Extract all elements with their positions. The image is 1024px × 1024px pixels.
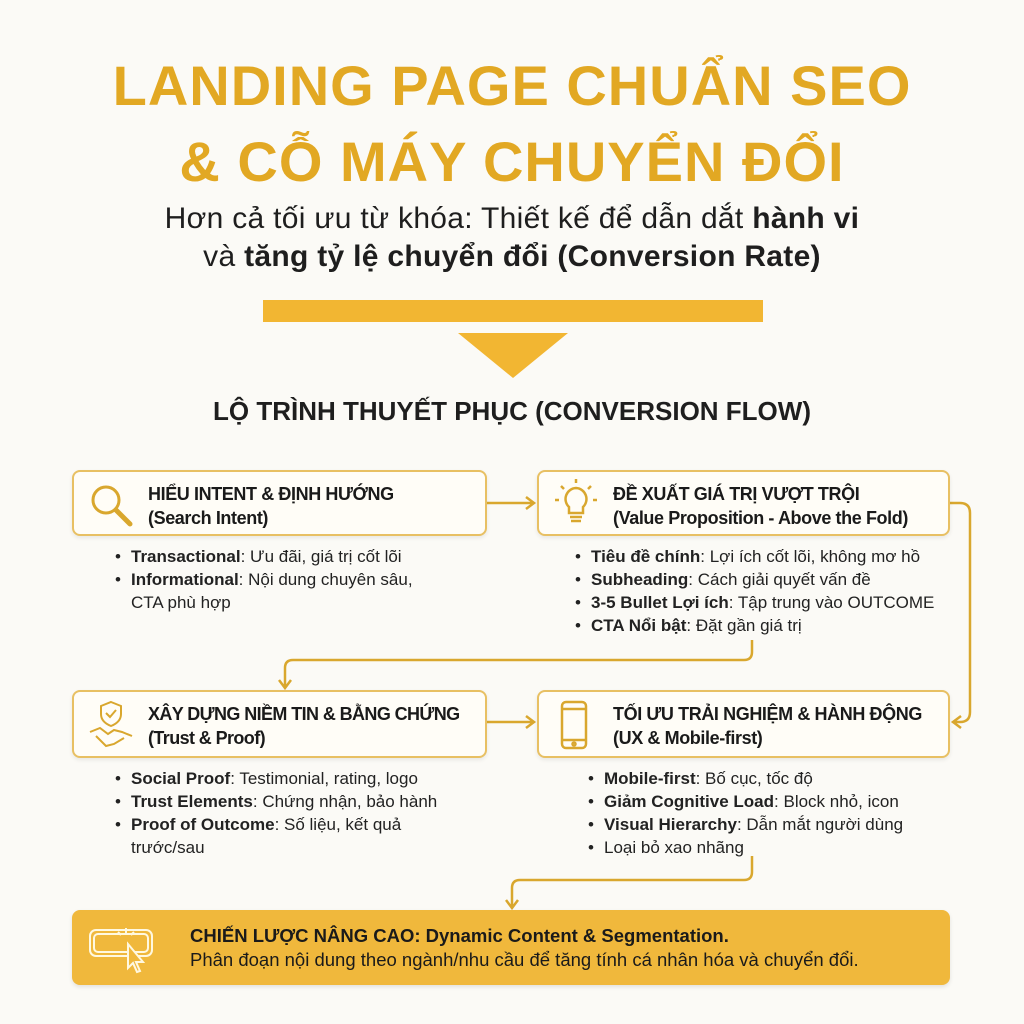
list: ux: Giảm Cognitive Load: Block nhỏ, icon: [604, 792, 899, 811]
panel: ux: TỐI ƯU TRẢI NGHIỆM & HÀNH ĐỘNG: [613, 704, 922, 724]
panel: ux: [537, 690, 950, 758]
list: trust: Social Proof: Testimonial, rating, logo: [131, 769, 418, 788]
icon: click button: [89, 928, 153, 974]
panel: advanced strategy: Phân đoạn nội dung theo ngành/nhu cầu để tăng tính cá nhân hóa và chuyển đổi.: [190, 949, 859, 970]
panel: value: (Value Proposition - Above the Fold): [613, 508, 908, 528]
list: trust: Trust Elements: Chứng nhận, bảo hành: [131, 792, 437, 811]
list: ux: Visual Hierarchy: Dẫn mắt người dùng: [604, 815, 903, 834]
icon: magnifier: [92, 486, 132, 526]
list: value: Subheading: Cách giải quyết vấn đề: [591, 570, 871, 589]
arrow: big down: [263, 300, 763, 378]
list: trust: Proof of Outcome: Số liệu, kết quả: [131, 815, 401, 834]
panel: trust: [72, 690, 487, 758]
panel: intent: HIỂU INTENT & ĐỊNH HƯỚNG: [148, 484, 394, 504]
list: intent: Transactional: Ưu đãi, giá trị cốt lõi: [131, 547, 402, 566]
subtitle: Hơn cả tối ưu từ khóa: Thiết kế để dẫn dắt hành vi: [165, 202, 859, 235]
list: ux: [588, 769, 903, 857]
list: intent: CTA phù hợp: [131, 593, 231, 612]
list: trust: [116, 769, 437, 857]
panel: trust: XÂY DỰNG NIỀM TIN & BẰNG CHỨNG: [148, 704, 460, 724]
list: value: [576, 547, 934, 635]
section heading: LỘ TRÌNH THUYẾT PHỤC (CONVERSION FLOW): [213, 396, 811, 426]
panel: value: [537, 470, 950, 536]
panel: trust: (Trust & Proof): [148, 728, 265, 748]
subtitle: [165, 202, 859, 273]
list: ux: Mobile-first: Bố cục, tốc độ: [604, 769, 813, 788]
list: trust: trước/sau: [131, 838, 205, 857]
list: intent: [116, 547, 413, 612]
list: value: CTA Nổi bật: Đặt gần giá trị: [591, 616, 802, 635]
title: & CỖ MÁY CHUYỂN ĐỔI: [179, 130, 845, 193]
panel: intent: (Search Intent): [148, 508, 268, 528]
icon: phone: [560, 700, 588, 750]
panel: value: ĐỀ XUẤT GIÁ TRỊ VƯỢT TRỘI: [613, 484, 859, 504]
title: [113, 54, 911, 193]
title: LANDING PAGE CHUẨN SEO: [113, 54, 911, 117]
list: ux: Loại bỏ xao nhãng: [604, 838, 744, 857]
panel: advanced strategy: CHIẾN LƯỢC NÂNG CAO: Dynamic Content & Segmentation.: [190, 925, 729, 946]
icon: shield handshake: [90, 700, 132, 748]
icon: bulb: [555, 479, 597, 522]
panel: ux: (UX & Mobile-first): [613, 728, 762, 748]
list: value: Tiêu đề chính: Lợi ích cốt lõi, không mơ hồ: [591, 547, 920, 566]
list: value: 3-5 Bullet Lợi ích: Tập trung vào OUTCOME: [591, 593, 934, 612]
subtitle: và tăng tỷ lệ chuyển đổi (Conversion Rate): [203, 240, 821, 273]
panel: intent: [72, 470, 487, 536]
list: intent: Informational: Nội dung chuyên sâu,: [131, 570, 413, 589]
panel: advanced strategy: [72, 910, 950, 985]
